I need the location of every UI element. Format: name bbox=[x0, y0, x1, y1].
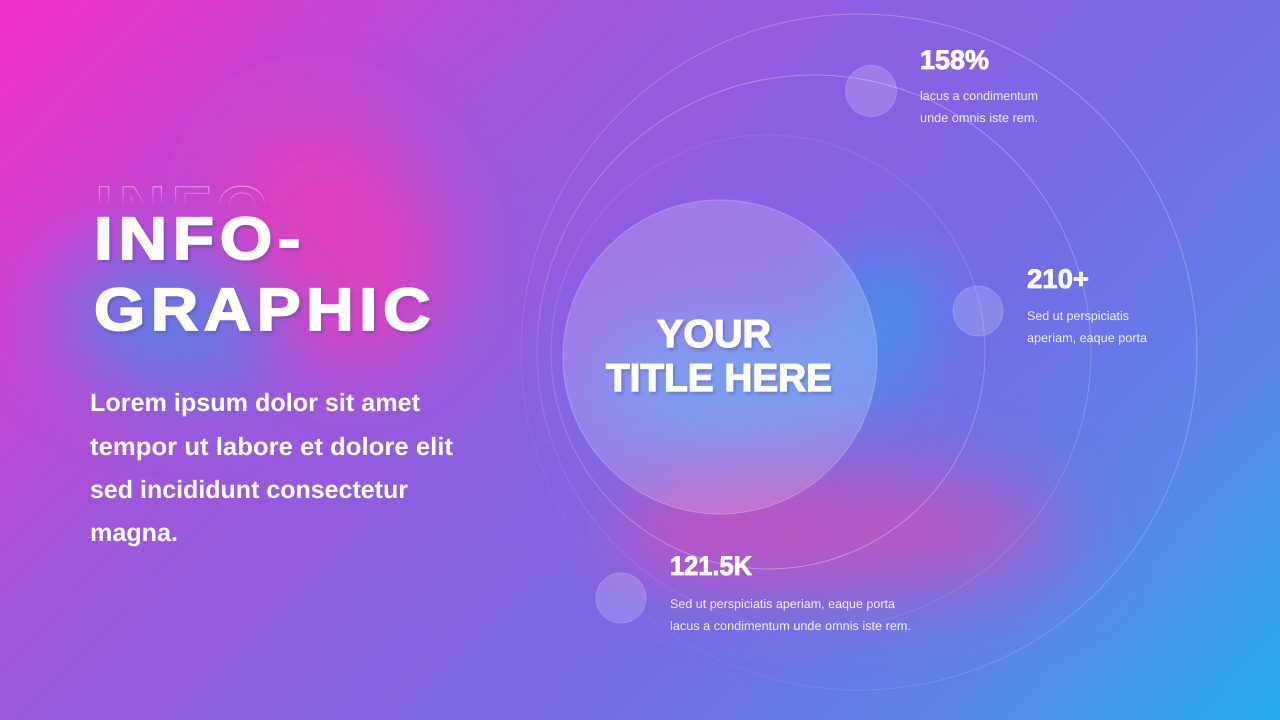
stat: 158%: 158% bbox=[920, 45, 989, 75]
body text bbox=[90, 389, 454, 547]
central title: YOUR bbox=[657, 313, 771, 356]
stat: 158%: unde omnis iste rem. bbox=[920, 111, 1038, 125]
marker: 158% bbox=[846, 66, 896, 116]
body text: sed incididunt consectetur bbox=[90, 476, 408, 504]
stat: 210+ bbox=[1027, 264, 1147, 345]
stat: 121.5K: lacus a condimentum unde omnis iste rem. bbox=[670, 619, 911, 633]
central glass circle bbox=[563, 200, 877, 514]
title: GRAPHIC bbox=[94, 276, 436, 343]
stat: 121.5K: Sed ut perspiciatis aperiam, eaque porta bbox=[670, 597, 895, 611]
stat: 121.5K bbox=[670, 551, 911, 633]
stat: 158% bbox=[920, 45, 1038, 125]
stat: 121.5K: 121.5K bbox=[670, 551, 752, 581]
marker: 210+ bbox=[953, 286, 1003, 336]
title: INFO- bbox=[94, 205, 306, 272]
stat: 210+: aperiam, eaque porta bbox=[1027, 331, 1147, 345]
title bbox=[94, 205, 436, 343]
marker: 121.5K bbox=[596, 573, 646, 623]
stat: 158%: lacus a condimentum bbox=[920, 89, 1038, 103]
body text: tempor ut labore et dolore elit bbox=[90, 433, 454, 461]
body text: magna. bbox=[90, 519, 178, 547]
body text: Lorem ipsum dolor sit amet bbox=[90, 389, 421, 417]
concentric ring outlines bbox=[521, 14, 1197, 690]
stat: 210+: 210+ bbox=[1027, 264, 1089, 294]
central title: TITLE HERE bbox=[606, 357, 832, 400]
stat: 210+: Sed ut perspiciatis bbox=[1027, 309, 1129, 323]
central title bbox=[606, 313, 832, 400]
ghost outlined title: INFO bbox=[95, 174, 273, 241]
